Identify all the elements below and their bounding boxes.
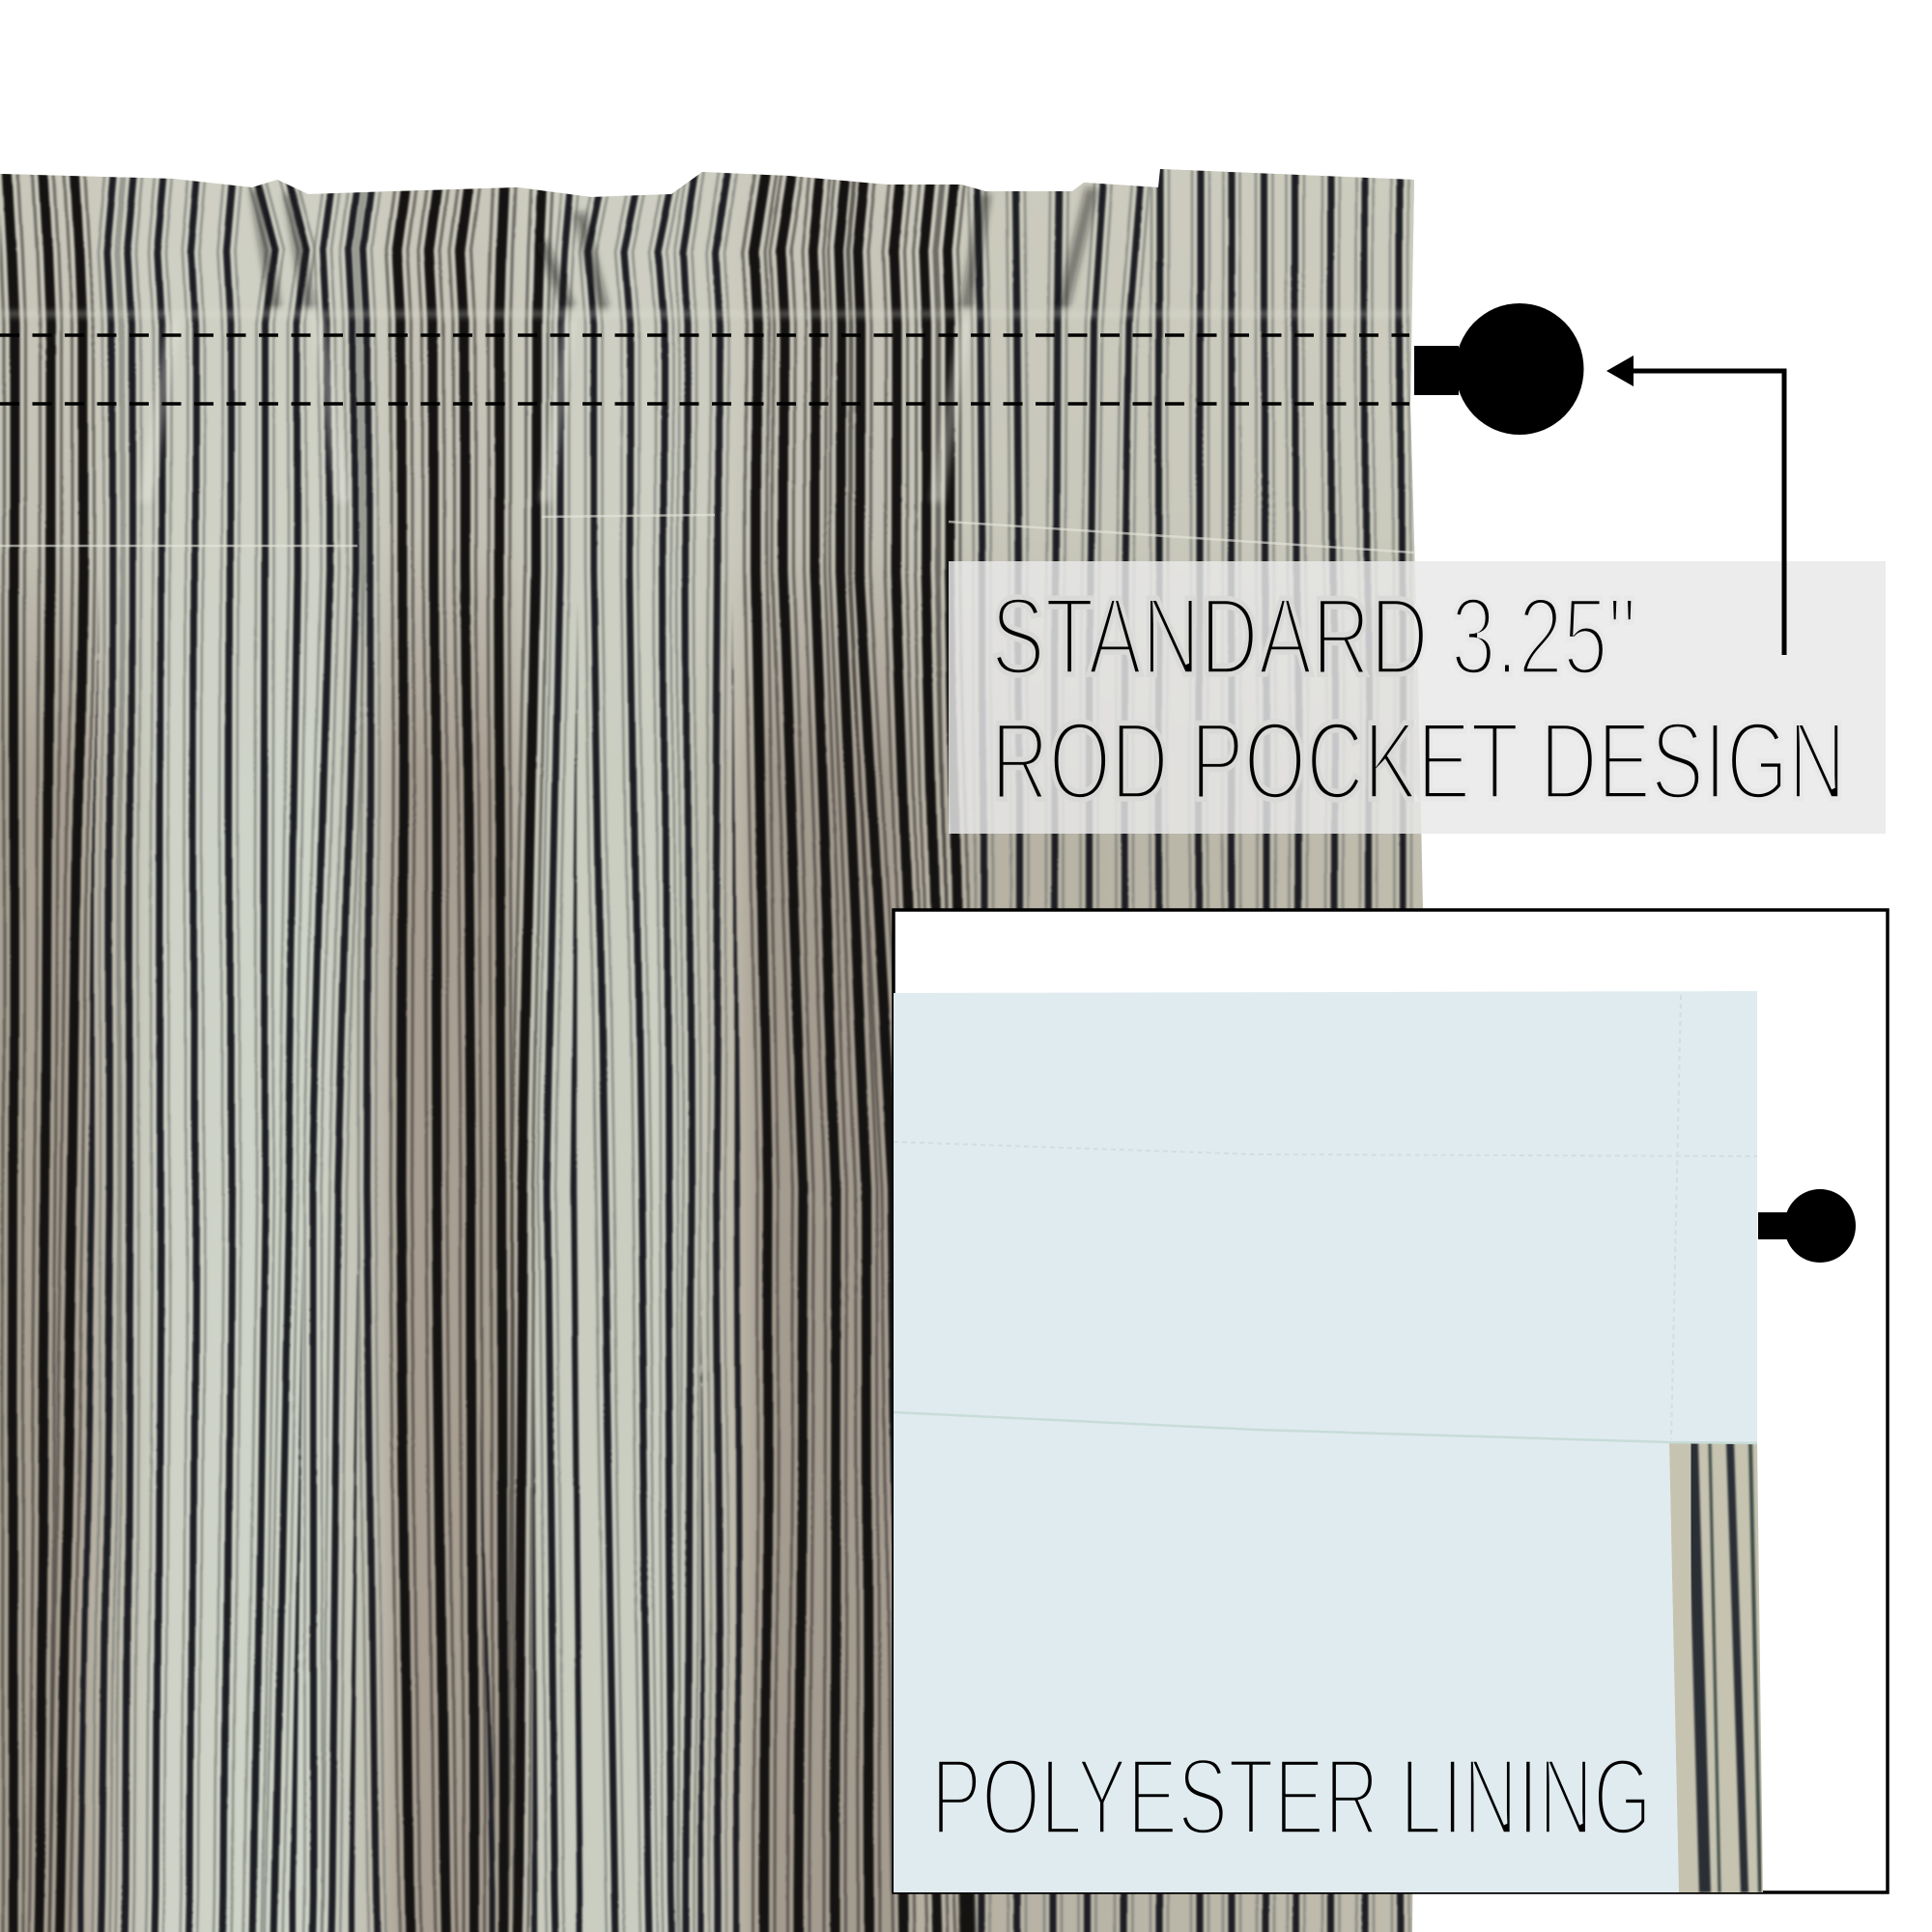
panel: polyester lining inset <box>894 910 1888 1895</box>
icon: small rod with finial <box>1758 1189 1856 1263</box>
icon: curtain rod with round finial <box>1414 303 1584 435</box>
curtain panel <box>0 164 1430 1932</box>
arrow: from caption to rod <box>1606 355 1784 655</box>
callout: rod pocket caption: STANDARD 3.25" <box>991 576 1636 698</box>
rod pocket dashed stitching lines <box>0 335 1409 404</box>
callout: rod pocket caption <box>949 561 1886 834</box>
lining stitching <box>894 995 1757 1439</box>
striped curtain edge behind lining <box>1666 1439 1768 1895</box>
lining fabric <box>894 991 1757 1892</box>
